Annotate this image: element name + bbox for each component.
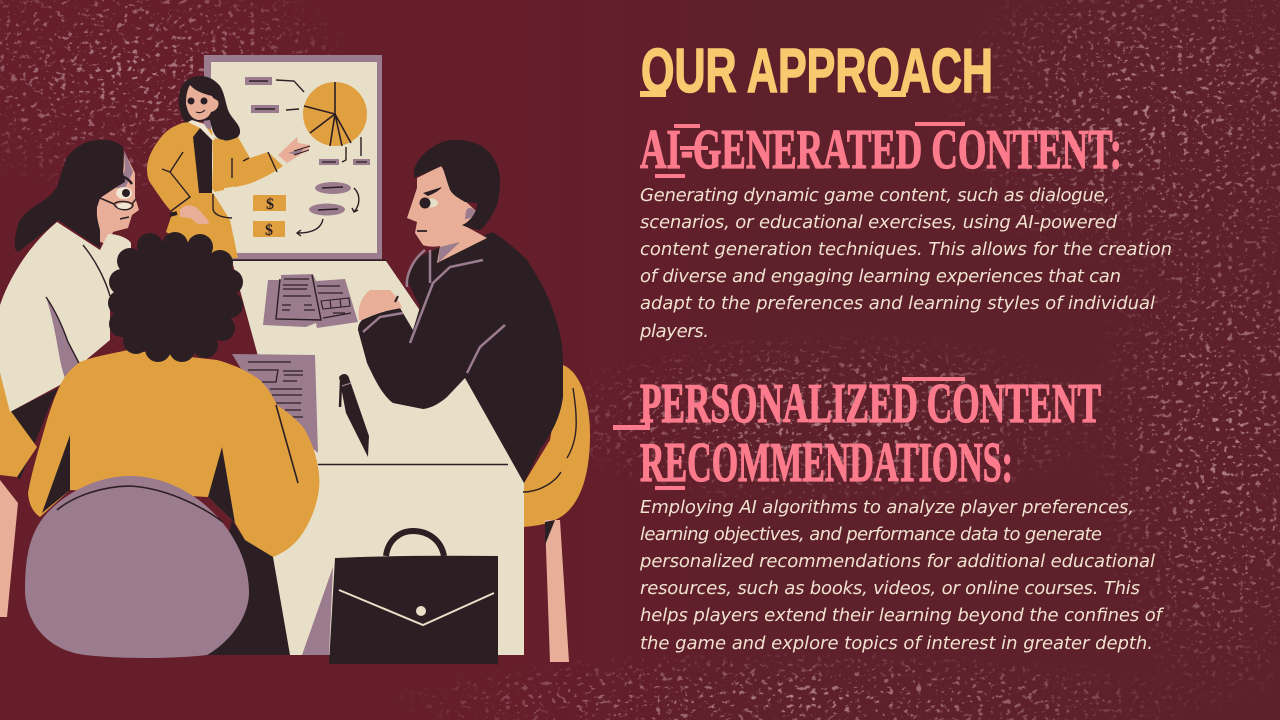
briefcase <box>329 531 498 664</box>
body text: AI-generated content: players. <box>639 321 709 342</box>
body text: personalized recommendations: Employing AI algorithms to analyze player preferences, <box>640 497 1134 518</box>
chart labels <box>245 77 370 165</box>
body text: AI-generated content: Generating dynamic game content, such as dialogue, <box>640 185 1110 206</box>
body text: personalized recommendations: helps players extend their learning beyond the confines of <box>640 605 1165 626</box>
body text: personalized recommendations: personalized recommendations for additional educational <box>639 551 1155 572</box>
pie chart <box>303 82 367 146</box>
flow ovals and arrows <box>297 182 359 236</box>
curly hair <box>108 232 243 362</box>
title <box>640 37 993 106</box>
open document on table <box>263 274 358 328</box>
presenter <box>147 76 310 258</box>
body text: personalized recommendations: the game and explore topics of interest in greater depth. <box>640 633 1153 654</box>
body text: AI-generated content: content generation techniques. This allows for the creation <box>640 239 1172 260</box>
woman with glasses <box>0 140 139 412</box>
left chair <box>0 373 58 617</box>
right chair <box>523 365 590 662</box>
body text: AI-generated content: scenarios, or educational exercises, using AI-powered <box>640 212 1118 233</box>
table <box>232 260 524 655</box>
dollar notes: $ <box>265 222 273 239</box>
report sheet <box>232 354 318 453</box>
dollar notes <box>253 195 286 239</box>
heading: personalized content recommendations: RECOMMENDATIONS: <box>640 432 1013 494</box>
body text: personalized recommendations: resources, such as books, videos, or online courses. This <box>640 578 1140 599</box>
body text: AI-generated content: adapt to the preferences and learning styles of individual <box>640 293 1155 314</box>
pen <box>339 374 369 457</box>
person seen from behind: curly hair and yellow sweater <box>28 232 319 557</box>
title: OUR APPROACH <box>641 37 993 106</box>
purple chair back <box>25 476 290 658</box>
presentation board <box>204 55 382 260</box>
heading: personalized content recommendations <box>613 373 1101 494</box>
man in black jacket <box>358 140 563 483</box>
illustration: business meeting <box>0 55 590 664</box>
body text: AI-generated content: of diverse and engaging learning experiences that can <box>640 266 1121 287</box>
body text: personalized recommendations: learning objectives, and performance data to generate <box>640 524 1102 545</box>
dollar notes: $ <box>266 196 274 213</box>
